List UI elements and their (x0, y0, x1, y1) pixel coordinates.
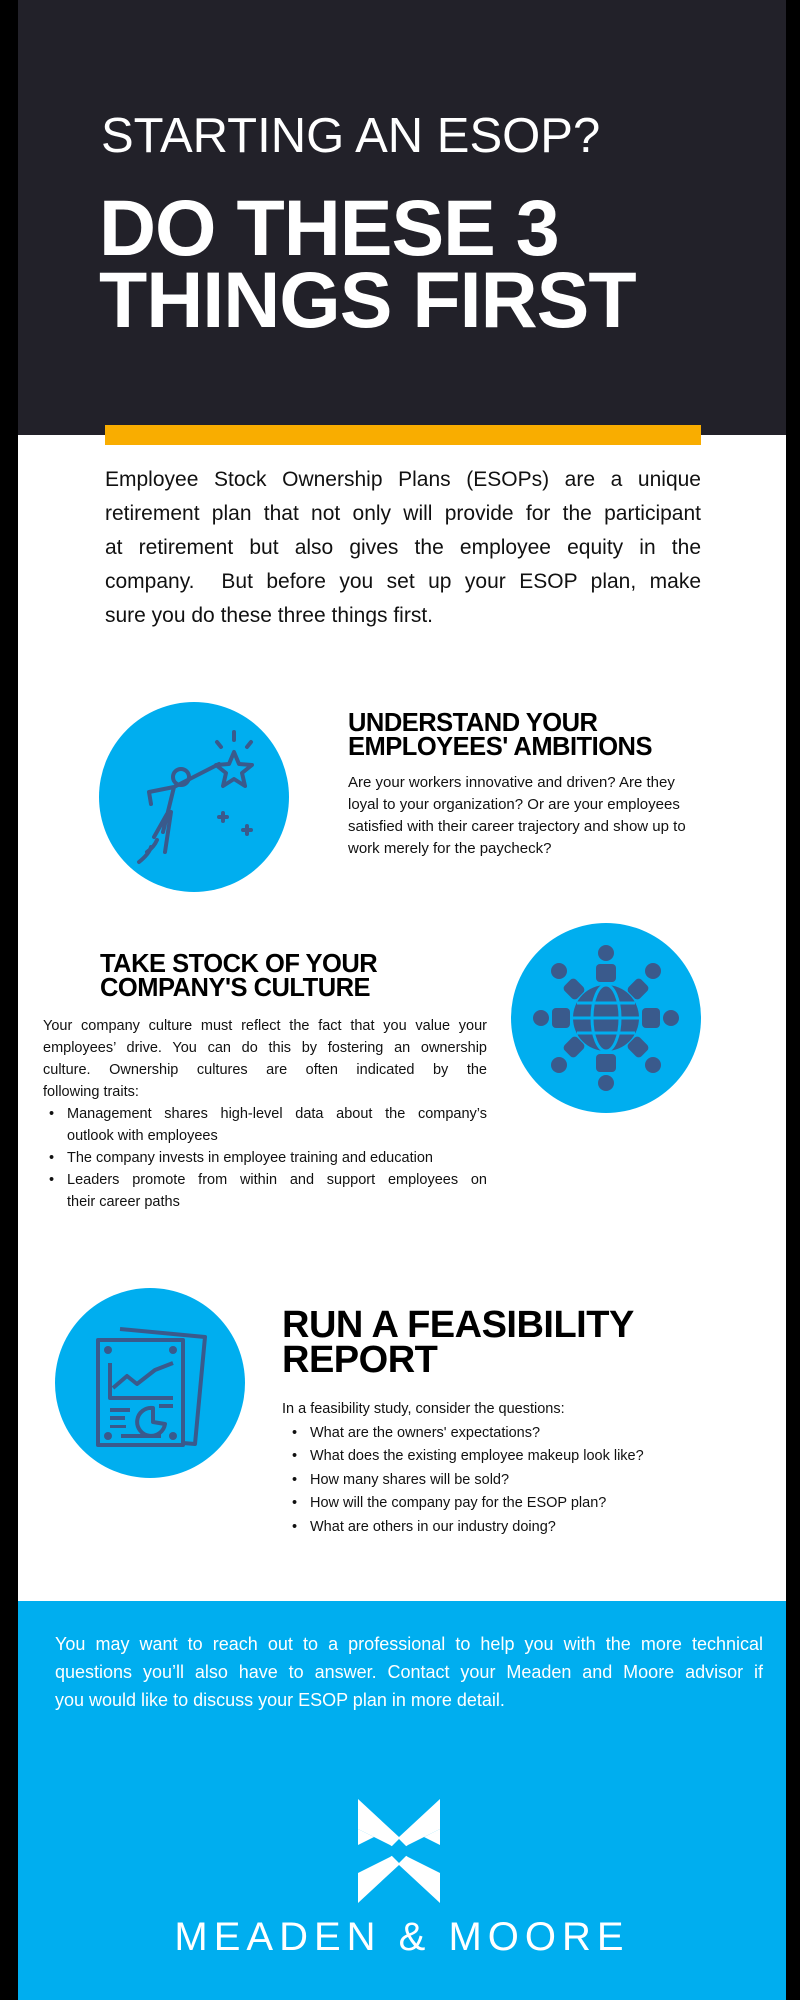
text: feasibility: What are others in our industry doing? (310, 1518, 556, 1534)
intro paragraph: retirement plan that not only will provide for the participant (105, 502, 701, 525)
main title: DO THESE 3 (99, 183, 559, 272)
footer text: you would like to discuss your ESOP plan in more detail. (55, 1690, 505, 1710)
footer text: questions you’ll also have to answer. Contact your Meaden and Moore advisor if (55, 1662, 763, 1682)
panel: ambitions (99, 702, 686, 892)
text: feasibility: How many shares will be sold? (310, 1472, 509, 1488)
text: culture: The company invests in employee training and education (67, 1150, 433, 1166)
text: culture: Leaders promote from within and support employees on (67, 1172, 487, 1188)
header panel (18, 0, 786, 435)
text: feasibility: What does the existing employee makeup look like? (310, 1448, 644, 1464)
text: culture (43, 1018, 487, 1210)
footer text: You may want to reach out to a professional to help you with the more technical (55, 1634, 763, 1654)
footer panel (18, 1601, 786, 2000)
main title: THINGS FIRST (99, 255, 636, 344)
icon: report (55, 1288, 245, 1478)
text: ambitions: Are your workers innovative and driven? Are they loyal to your organization? Or are your employees satisfied with their career trajectory and show up to work merely for the paycheck? (348, 774, 686, 857)
subtitle: STARTING AN ESOP? (101, 109, 600, 163)
yellow accent bar (105, 425, 701, 445)
text: feasibility (282, 1401, 644, 1534)
heading: ambitions: UNDERSTAND YOUR (348, 709, 597, 737)
heading: ambitions: EMPLOYEES' AMBITIONS (348, 733, 652, 761)
panel: feasibility (55, 1288, 644, 1534)
panel: culture (43, 923, 701, 1210)
intro paragraph (105, 468, 701, 627)
main title (99, 183, 636, 344)
text: culture: outlook with employees (67, 1128, 218, 1144)
footer text (55, 1634, 764, 1710)
intro paragraph: at retirement but also gives the employee equity in the (105, 536, 701, 559)
intro paragraph: company. But before you set up your ESOP plan, make (105, 570, 701, 593)
text: culture: culture. Ownership cultures are often indicated by the (43, 1062, 487, 1078)
heading: culture (100, 950, 378, 1002)
intro paragraph: Employee Stock Ownership Plans (ESOPs) are a unique (105, 468, 701, 491)
text: culture: Your company culture must reflect the fact that you value your (43, 1018, 487, 1034)
heading: culture: TAKE STOCK OF YOUR (100, 950, 377, 978)
icon: reaching for star (99, 702, 289, 892)
heading: feasibility: REPORT (282, 1339, 437, 1381)
intro paragraph: sure you do these three things first. (105, 604, 433, 627)
text: culture: employees’ drive. You can do this by fostering an ownership (43, 1040, 487, 1056)
text: feasibility: How will the company pay for the ESOP plan? (310, 1495, 606, 1511)
text: culture: following traits: (43, 1084, 139, 1100)
logo text: MEADEN & MOORE (174, 1915, 630, 1959)
heading: feasibility (282, 1304, 634, 1381)
text: culture: Management shares high-level data about the company’s (67, 1106, 487, 1122)
heading: feasibility: RUN A FEASIBILITY (282, 1304, 634, 1346)
logo mark (358, 1799, 440, 1903)
heading: ambitions (348, 709, 652, 761)
text: culture: their career paths (67, 1194, 180, 1210)
heading: culture: COMPANY'S CULTURE (100, 974, 370, 1002)
text: feasibility: In a feasibility study, consider the questions: (282, 1401, 565, 1417)
icon: global team (511, 923, 701, 1113)
text: feasibility: What are the owners' expectations? (310, 1424, 540, 1440)
